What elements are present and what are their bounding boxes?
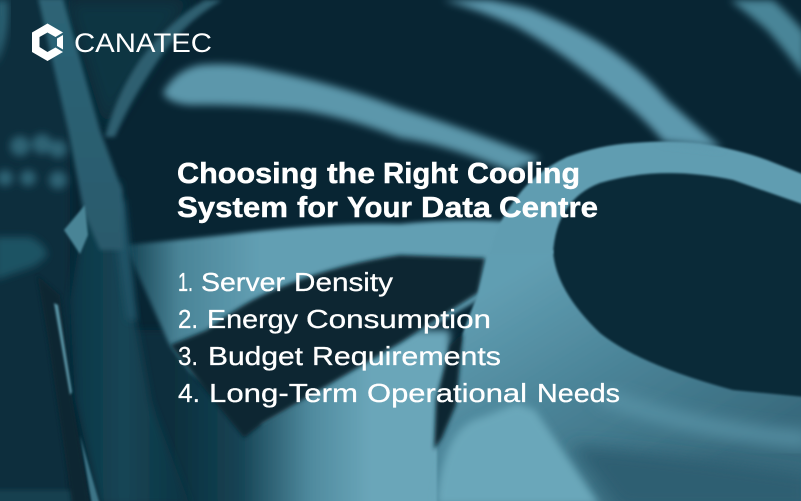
left dark panel <box>0 0 70 501</box>
item 2: Consumption <box>306 304 491 334</box>
item 3: 3. <box>178 341 198 371</box>
logo: Canatec <box>32 24 212 61</box>
item 4: Needs <box>537 378 620 408</box>
ring <box>490 142 801 254</box>
upper blade <box>163 64 540 172</box>
item 3: Requirements <box>312 341 501 371</box>
item 1: Server <box>201 267 285 297</box>
item 4 <box>178 378 620 408</box>
item 3 <box>178 341 501 371</box>
item 1: Density <box>294 267 393 297</box>
item 4: Operational <box>367 378 527 408</box>
title <box>177 158 598 224</box>
item 1: 1. <box>178 267 193 297</box>
fan hub interior tone <box>553 173 801 397</box>
title: the <box>327 158 375 190</box>
list of cooling considerations <box>178 267 620 408</box>
lower right dark falloff <box>570 445 801 501</box>
wordmark: CANATEC <box>74 28 212 58</box>
item 3: Budget <box>208 341 304 371</box>
item 2 <box>178 304 491 334</box>
item 4: 4. <box>178 378 200 408</box>
title: Cooling <box>467 158 580 190</box>
hub lower body <box>437 250 801 501</box>
mid blade wide light band <box>125 220 510 424</box>
upper long band <box>443 0 722 148</box>
dark wedge behind list <box>170 255 485 438</box>
strut left lower <box>70 180 190 501</box>
title: Choosing <box>177 158 318 190</box>
icon: hexagon mark <box>32 24 63 61</box>
title: Right <box>383 158 458 190</box>
title: System <box>177 192 288 224</box>
diamond highlight <box>64 205 88 254</box>
dark slit <box>434 333 463 450</box>
left edge glow <box>0 0 8 65</box>
thin curved strut <box>105 0 222 137</box>
left bottom strip <box>0 490 85 501</box>
front blade <box>437 403 600 501</box>
lower blade wash <box>120 330 450 501</box>
item 2: Energy <box>207 304 298 334</box>
dark inner edge <box>37 275 90 501</box>
top right band <box>730 0 801 77</box>
title: for <box>297 192 338 224</box>
title: Centre <box>499 192 598 224</box>
title: Your <box>347 192 412 224</box>
item 4: Long-Term <box>209 378 358 408</box>
item 2: 2. <box>178 304 198 334</box>
title: Data <box>421 192 492 224</box>
bokeh spots <box>0 134 67 189</box>
hub highlight <box>600 395 801 440</box>
strut left upper <box>38 0 123 250</box>
item 1 <box>178 267 393 297</box>
